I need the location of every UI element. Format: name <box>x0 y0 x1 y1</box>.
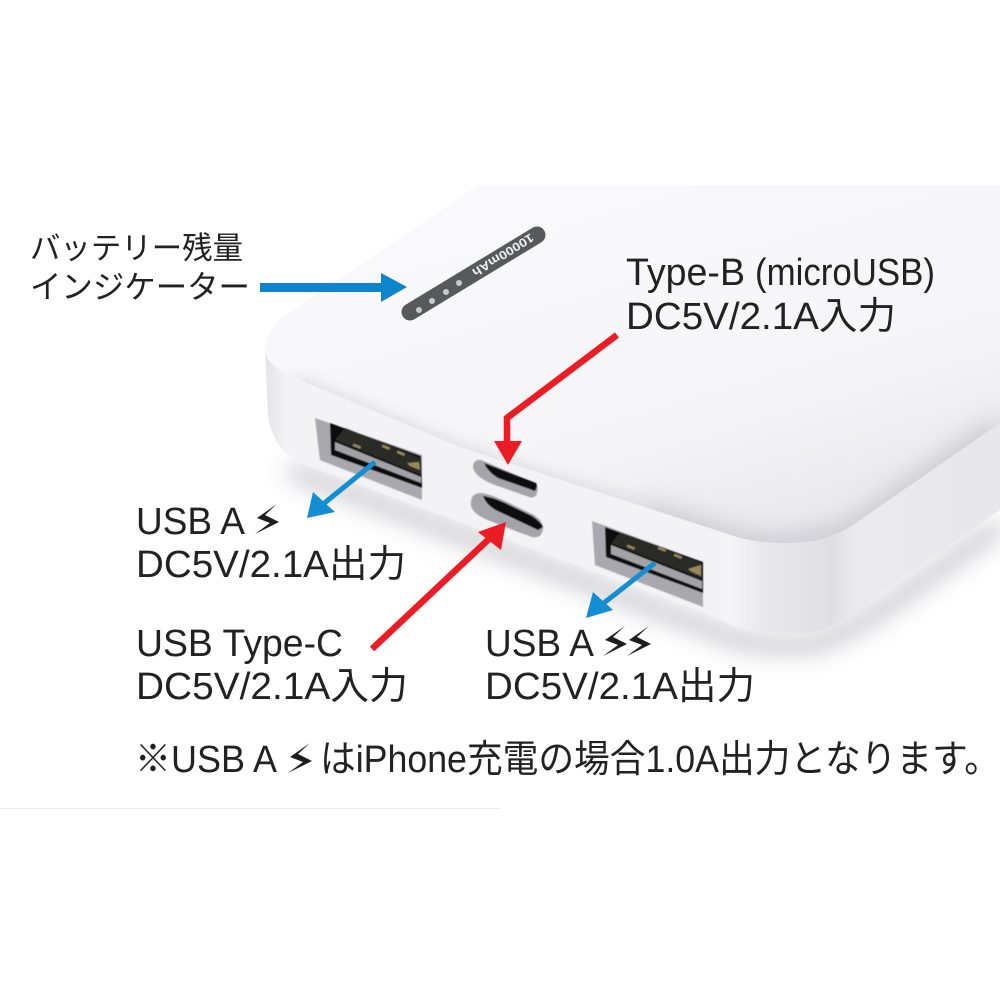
icon: double lightning bolt <box>603 626 651 656</box>
footnote: ※USB A <box>135 739 278 781</box>
gold pins <box>627 545 701 576</box>
label: micro USB: (microUSB) <box>755 252 935 294</box>
label: right USB A: DC5V/2.1A出力 <box>485 666 755 708</box>
label: left USB A: DC5V/2.1A出力 <box>136 544 406 586</box>
label: USB Type-C: USB Type-C <box>136 623 343 665</box>
label: battery indicator: バッテリー残量 <box>30 231 243 266</box>
icon: lightning bolt <box>288 743 312 773</box>
capacity label: 10000mAh <box>470 231 536 279</box>
label: micro USB <box>626 252 935 338</box>
label: right USB A <box>485 623 755 708</box>
device side wall <box>265 300 1000 633</box>
micro USB port <box>473 460 538 498</box>
label: micro USB: Type-B <box>626 252 745 294</box>
right USB A port <box>592 521 703 607</box>
label: right USB A: USB A <box>485 623 595 665</box>
label: battery indicator: インジケーター <box>30 269 250 305</box>
USB Type-C port <box>471 493 543 537</box>
arrow: USB Type-C <box>372 522 506 649</box>
label: USB Type-C <box>136 623 408 708</box>
left USB A port <box>315 418 422 500</box>
label: battery indicator <box>30 231 250 305</box>
power bank device <box>265 185 1000 646</box>
arrow: micro USB <box>494 335 617 465</box>
arrow: right USB A <box>586 563 655 618</box>
device top face <box>265 185 1000 546</box>
arrow: left USB A <box>307 462 375 518</box>
battery indicator panel <box>410 231 537 313</box>
arrow: battery indicator <box>260 273 407 302</box>
gold pins <box>353 444 420 470</box>
icon: lightning bolt <box>255 504 279 534</box>
label: USB Type-C: DC5V/2.1A入力 <box>136 666 408 708</box>
indicator LEDs <box>416 280 462 313</box>
label: left USB A: USB A <box>136 501 246 543</box>
label: left USB A <box>136 501 406 586</box>
ground shadow <box>290 470 1000 646</box>
faint scan line <box>0 808 500 809</box>
label: micro USB: DC5V/2.1A入力 <box>626 296 896 338</box>
